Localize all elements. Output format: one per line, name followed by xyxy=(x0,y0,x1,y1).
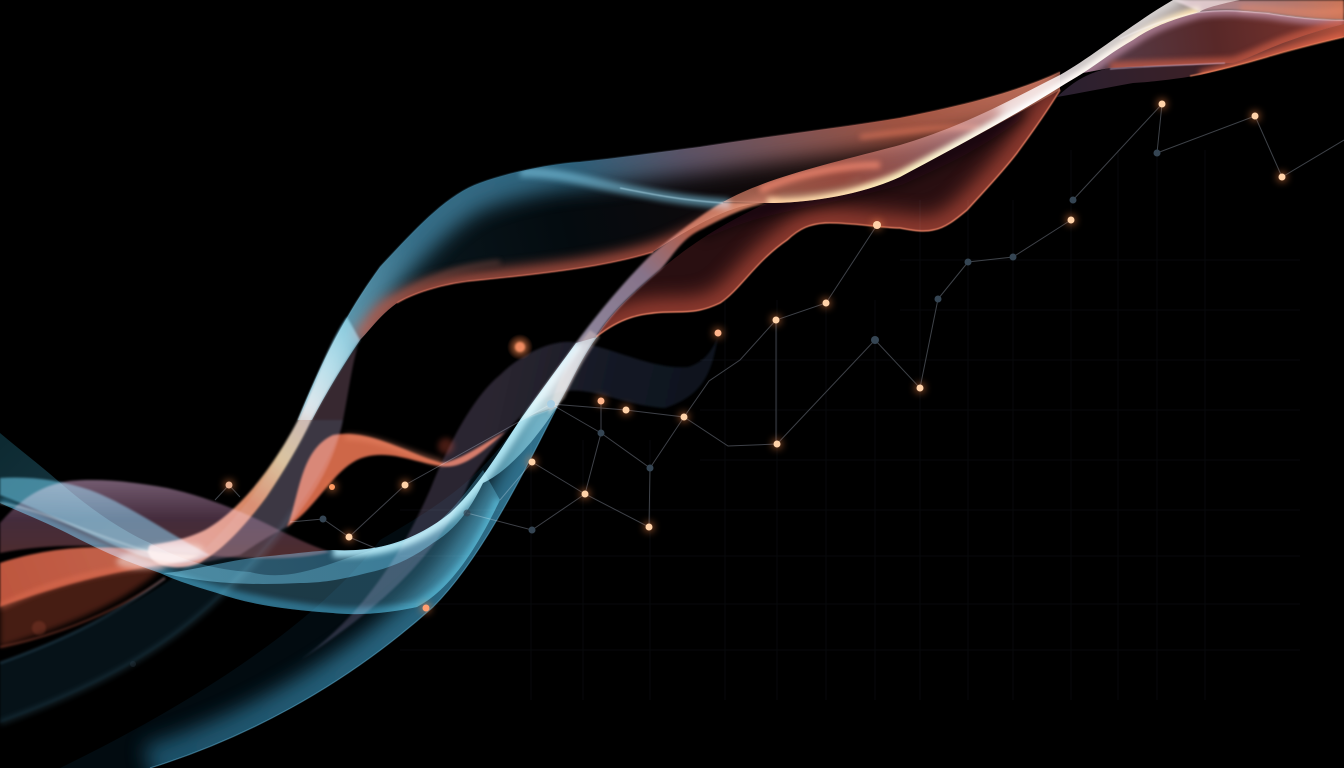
ribbon: bright blue cable xyxy=(0,337,597,584)
ribbon: top right red fold xyxy=(1084,10,1344,73)
ribbon: left orange bands xyxy=(0,547,200,647)
ribbon: top right pink stream xyxy=(1173,0,1344,20)
ribbon: top right dark fold xyxy=(1057,24,1344,97)
ribbon: lower left blue band xyxy=(0,433,500,614)
large soft glow node xyxy=(507,334,533,360)
ribbon: orange loop xyxy=(287,432,505,527)
ribbon: central pale strand xyxy=(520,202,767,420)
network nodes: blue grey xyxy=(130,150,1160,667)
ribbon: lower orange wave xyxy=(595,89,1061,338)
network lines xyxy=(215,104,1344,548)
dim glow node left xyxy=(32,621,46,635)
network nodes: orange glowing xyxy=(224,99,1287,613)
ribbon: purple veil xyxy=(0,480,330,558)
ribbon: large outer blue sweep xyxy=(60,407,558,768)
ribbon: cream highlight strand xyxy=(723,0,1240,203)
ribbon: pale orange strand xyxy=(115,317,360,573)
glow behind orange loop xyxy=(438,438,454,454)
faint grid xyxy=(400,150,1300,700)
ribbon: dark blue fan left xyxy=(0,420,343,723)
ribbon: upper blue to orange band xyxy=(297,71,1061,420)
ribbon: grey shadow wave xyxy=(300,337,718,660)
